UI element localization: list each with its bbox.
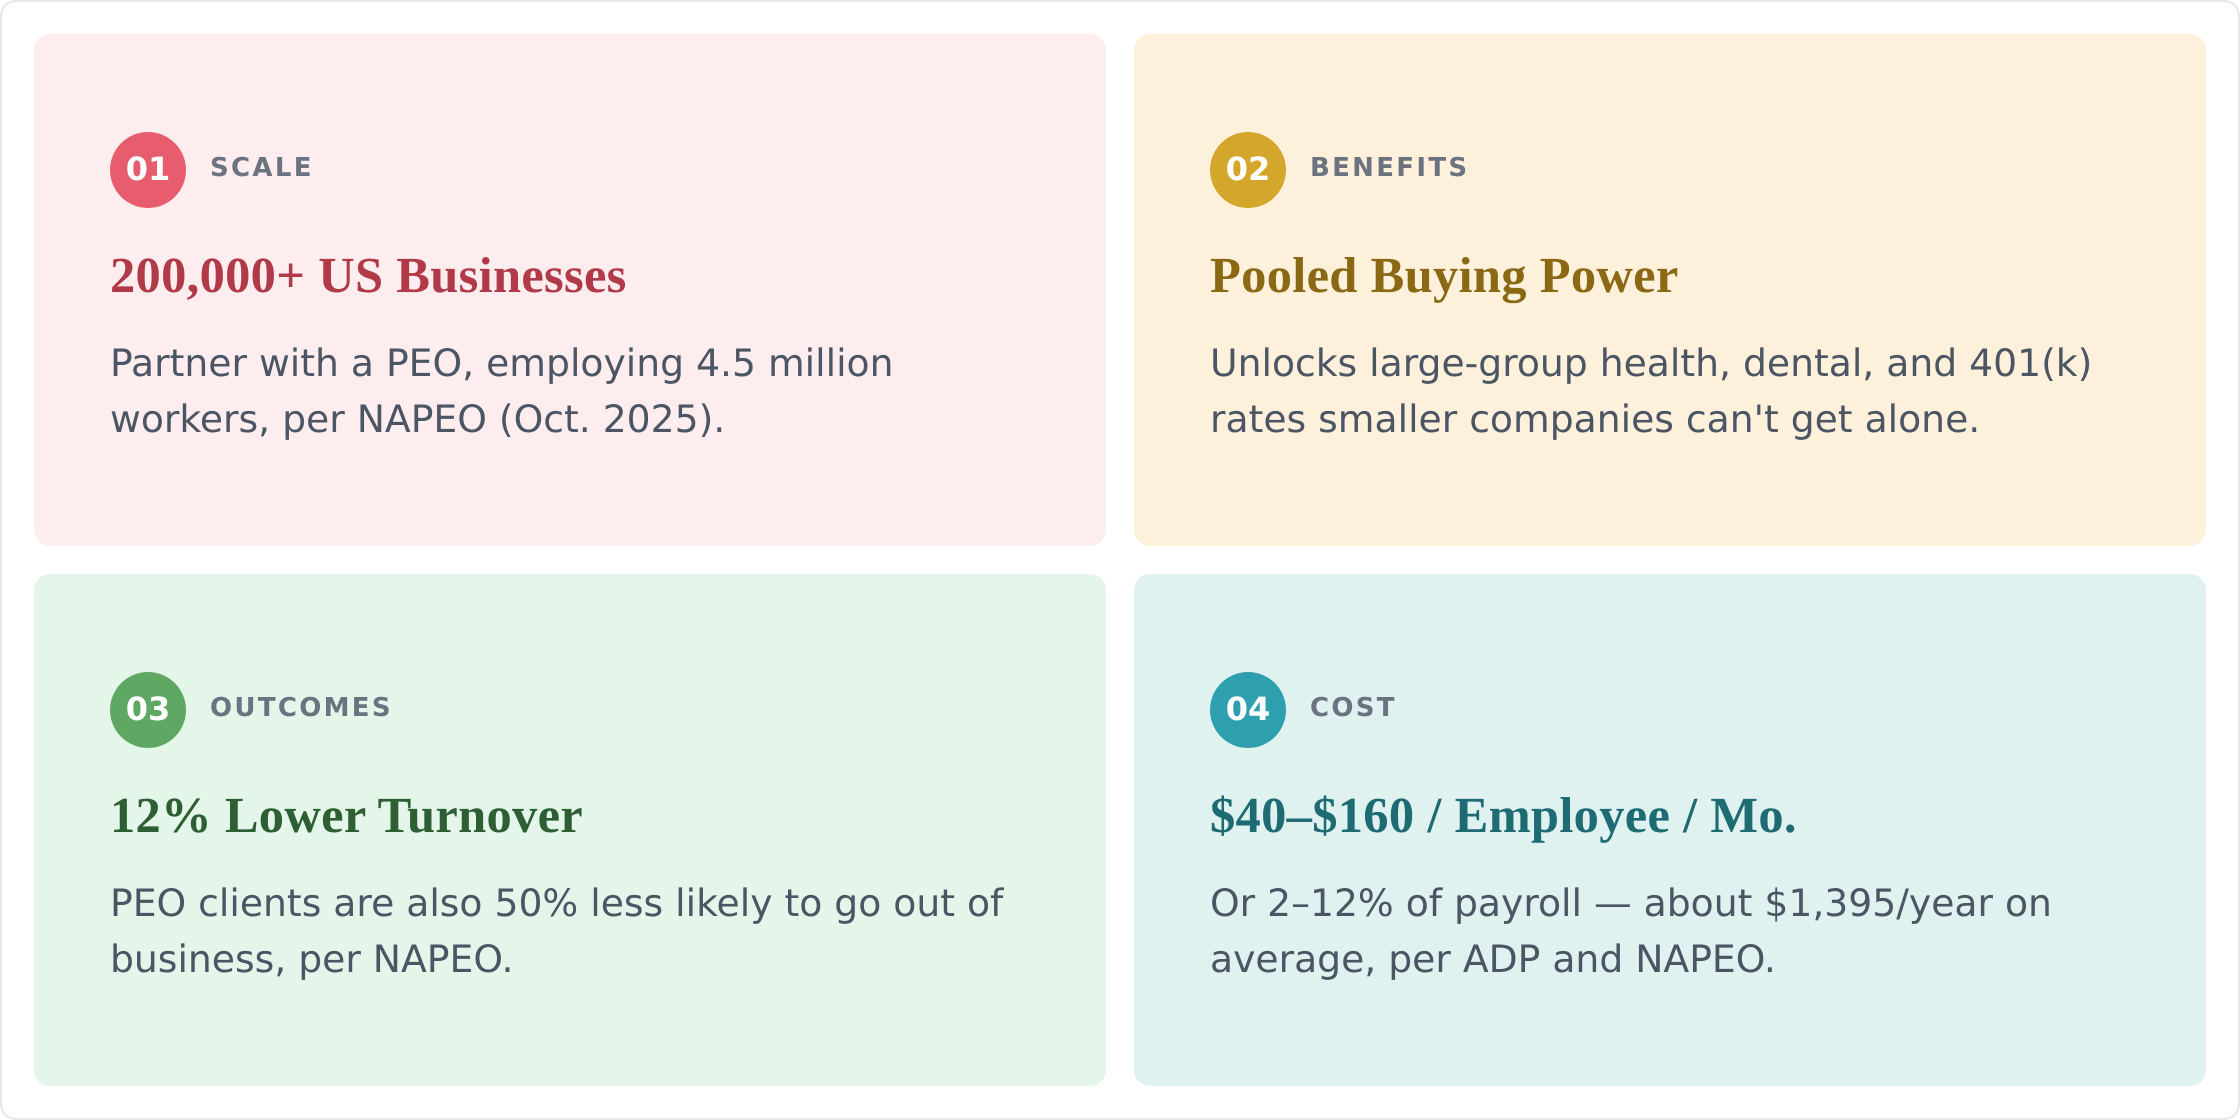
text: benefits description: Unlocks large-group health, dental, and 401(k) — [1210, 340, 2092, 384]
badge: 02 — [1210, 132, 1286, 208]
label: cost: COST — [1310, 692, 1397, 722]
text: cost description: average, per ADP and NAPEO. — [1210, 936, 1776, 980]
badge: 04 — [1210, 672, 1286, 748]
panel: benefits — [1134, 34, 2206, 546]
label: scale: SCALE — [210, 152, 314, 182]
panel: outcomes — [34, 574, 1106, 1086]
label: benefits: BENEFITS — [1310, 152, 1469, 182]
panel: scale — [34, 34, 1106, 546]
text: scale description: Partner with a PEO, employing 4.5 million — [110, 340, 894, 384]
heading: Pooled Buying Power: Pooled Buying Power — [1210, 246, 1679, 302]
heading: 12% Lower Turnover: 12% Lower Turnover — [110, 786, 583, 842]
text: outcomes description: PEO clients are also 50% less likely to go out of — [110, 880, 1003, 924]
badge: 02: 02 — [1226, 150, 1270, 188]
text: cost description: Or 2–12% of payroll — about $1,395/year on — [1210, 880, 2052, 924]
text: outcomes description — [110, 880, 1004, 980]
heading: 200,000+ US Businesses: 200,000+ US Businesses — [110, 246, 627, 302]
text: scale description — [110, 340, 894, 440]
badge: 03: 03 — [126, 690, 170, 728]
text: cost description — [1210, 880, 2052, 980]
text: benefits description — [1210, 340, 2092, 440]
text: scale description: workers, per NAPEO (Oct. 2025). — [110, 396, 725, 440]
text: benefits description: rates smaller companies can't get alone. — [1210, 396, 1980, 440]
badge: 04: 04 — [1226, 690, 1270, 728]
badge: 03 — [110, 672, 186, 748]
text: outcomes description: business, per NAPEO. — [110, 936, 513, 980]
badge: 01 — [110, 132, 186, 208]
label: outcomes: OUTCOMES — [210, 692, 393, 722]
panel: cost — [1134, 574, 2206, 1086]
badge: 01: 01 — [126, 150, 170, 188]
heading: $40–$160 / Employee / Mo.: $40–$160 / Employee / Mo. — [1210, 786, 1797, 842]
